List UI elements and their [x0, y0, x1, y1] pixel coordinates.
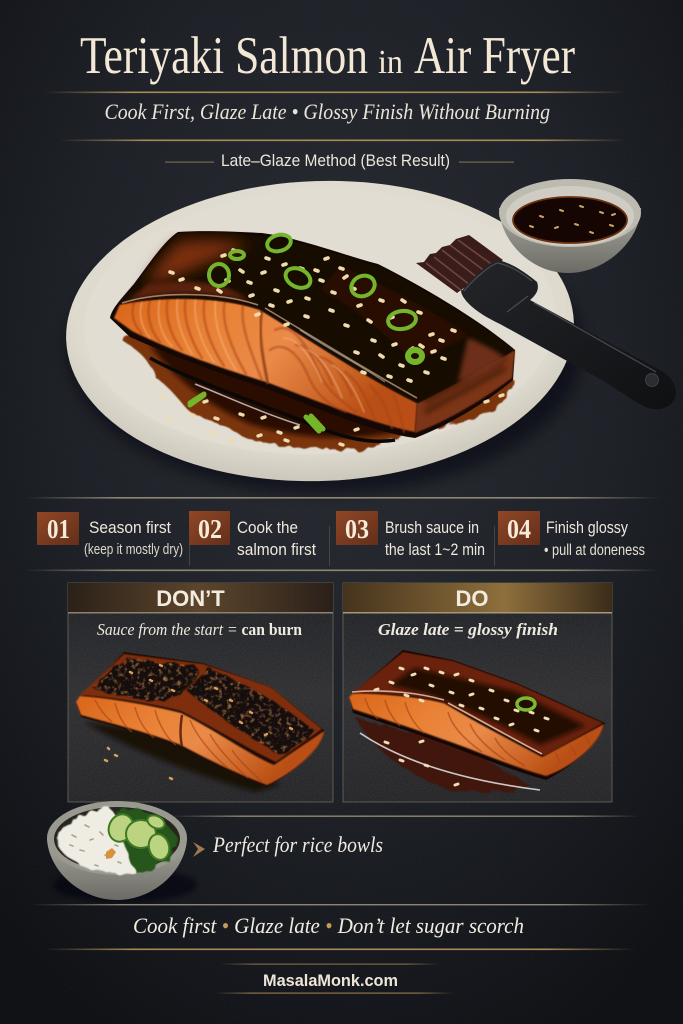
step 04: [498, 511, 645, 559]
step 03: 03: [345, 514, 369, 544]
step 04: 04: [507, 514, 531, 544]
plate: [61, 172, 583, 494]
section heading: Late–Glaze Method (Best Result): [221, 151, 450, 170]
step 01: 01: [47, 514, 70, 544]
title: Air Fryer: [414, 27, 575, 85]
rule above bowl: [170, 816, 640, 817]
step 02: [189, 511, 316, 559]
step 01: [37, 512, 183, 558]
summary line: Cook first • Glaze late • Don’t let sugar scorch: [133, 913, 524, 938]
step 02: salmon first: [237, 540, 316, 559]
hero: plate with salmon: [61, 172, 583, 494]
rice: [57, 808, 136, 873]
rice bowl: [47, 801, 197, 902]
greens: [115, 809, 178, 872]
step 03: the last 1~2 min: [385, 540, 485, 559]
step 03: Brush sauce in: [385, 518, 479, 537]
step 04: Finish glossy: [546, 518, 628, 537]
cucumber slices: [104, 810, 172, 862]
caption: don't: Sauce from the start = can burn: [97, 620, 302, 639]
panel: don't: [68, 583, 333, 802]
step 01: (keep it mostly dry): [84, 542, 183, 558]
caption: do: Glaze late = glossy finish: [378, 620, 558, 639]
step 02: 02: [198, 514, 222, 544]
website: MasalaMonk.com: [263, 971, 398, 990]
header: don't: DON’T: [156, 586, 225, 611]
glaze top: [118, 233, 513, 403]
step 02: Cook the: [237, 518, 298, 537]
sauce bowl: [499, 179, 641, 273]
step 03: [336, 511, 485, 559]
header: don't: [68, 583, 333, 614]
title: in: [378, 44, 403, 81]
salmon fillet: [110, 231, 515, 441]
title: Teriyaki Salmon: [80, 27, 368, 85]
burnt salmon: [76, 652, 324, 792]
sesame seeds: [170, 250, 455, 381]
header: do: DO: [456, 586, 488, 611]
rice bowl note: Perfect for rice bowls: [212, 832, 383, 857]
steps strip: [25, 497, 660, 571]
flesh flakes: [132, 297, 404, 432]
sauce pool: [122, 320, 514, 450]
basting brush: [416, 235, 676, 409]
header: do: [343, 583, 612, 614]
step 01: Season first: [89, 518, 171, 537]
panel: do: [343, 583, 612, 802]
subtitle: Cook First, Glaze Late • Glossy Finish Without Burning: [104, 99, 550, 124]
glossy salmon: [349, 650, 605, 792]
arrow: [193, 842, 205, 857]
scallion rings: [190, 232, 422, 431]
step 04: • pull at doneness: [544, 542, 645, 559]
